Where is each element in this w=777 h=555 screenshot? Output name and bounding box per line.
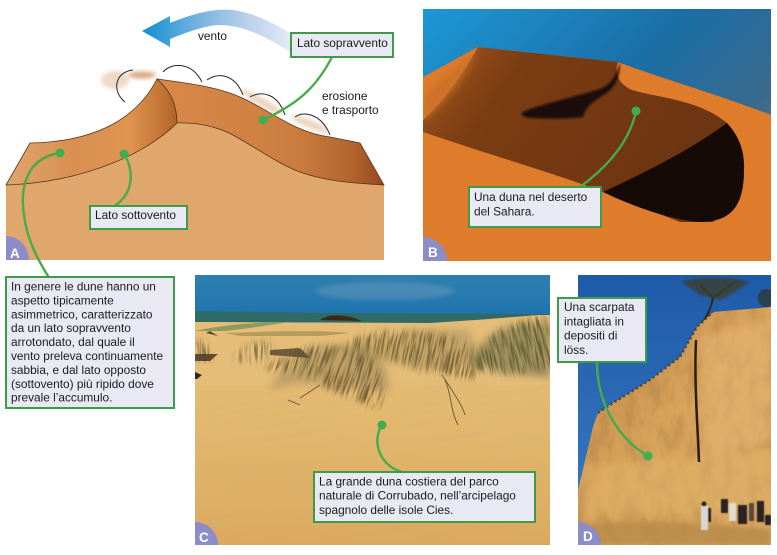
dark crest vegetation — [598, 312, 713, 413]
soft lit edge on slip face — [423, 47, 478, 122]
callout: coastal dune: spagnolo delle isole Cies. — [319, 503, 453, 517]
label: erosione e trasporto: e trasporto — [322, 103, 379, 117]
callout: loess: depositi di — [564, 329, 617, 343]
badge B: B — [428, 245, 438, 260]
tree — [682, 276, 771, 324]
leader — [597, 362, 652, 460]
badge A — [6, 236, 29, 261]
badge D — [578, 522, 601, 545]
lagoon — [195, 322, 290, 331]
people — [701, 499, 771, 530]
photo B: Sahara dune — [423, 9, 771, 261]
callout: dune description — [6, 277, 174, 408]
callout: dune description: vento preleva continuamente — [11, 349, 164, 363]
callout: dune description: (sottovento) più ripido dove — [11, 377, 154, 391]
callout: Sahara: del Sahara. — [474, 204, 535, 218]
callout: loess: Una scarpata — [564, 300, 635, 314]
callout: dune description: sabbia, e dal lato opposto — [11, 363, 146, 377]
wind arrow — [142, 10, 290, 52]
sky — [195, 275, 550, 315]
callout: coastal dune — [314, 472, 535, 522]
badge C: C — [199, 530, 209, 545]
photo D: loess scarp — [578, 275, 774, 545]
dune block front face — [6, 123, 384, 260]
leeward side band — [6, 79, 177, 185]
callout: Lato sottovento: Lato sottovento — [95, 208, 176, 222]
label: vento: vento — [198, 29, 227, 43]
windward side band — [157, 79, 384, 185]
photo C: coastal dune — [195, 275, 550, 545]
callout: Lato sottovento — [90, 206, 187, 229]
callout: loess: löss. — [564, 343, 588, 357]
callout: coastal dune: naturale di Corrubado, nell’arcipelago — [319, 489, 516, 503]
badge C — [195, 522, 218, 545]
callout: Lato sopravvento — [291, 33, 393, 57]
callout: dune description: aspetto tipicamente — [11, 293, 114, 307]
leader: Lato sopravvento — [258, 57, 332, 124]
shaded slip face — [423, 47, 743, 222]
badge D: D — [583, 529, 593, 544]
ground — [578, 521, 771, 545]
panel A: dune diagram — [6, 10, 384, 276]
crack — [695, 340, 699, 462]
callout: dune description: arrotondato, dal quale il — [11, 335, 135, 349]
sea and far shore — [195, 311, 550, 324]
saltation arcs — [117, 65, 330, 135]
leader: Lato sottovento — [116, 150, 131, 205]
dune crest — [198, 318, 501, 324]
callout: Sahara — [469, 187, 601, 227]
cliff — [578, 307, 771, 545]
callout: coastal dune: La grande duna costiera del parco — [319, 474, 499, 488]
callout: loess: intagliata in — [564, 314, 624, 328]
callout: dune description: da un lato sopravvento — [11, 321, 131, 335]
sand ripples — [166, 358, 581, 555]
cliff texture — [578, 300, 771, 545]
leader — [580, 106, 640, 187]
pale bands — [700, 320, 771, 460]
leader: explanatory text — [23, 148, 64, 276]
sand — [423, 47, 771, 261]
blown sand — [101, 71, 330, 135]
callout: loess — [558, 298, 646, 362]
callout: dune description: asimmetrico, caratterizzato — [11, 307, 153, 321]
badge B — [423, 237, 447, 261]
badge A: A — [10, 246, 20, 261]
callout: dune description: In genere le dune hanno un — [11, 280, 156, 294]
grass clumps — [190, 314, 565, 409]
leader — [377, 420, 402, 472]
upper shadow — [522, 62, 620, 119]
label: erosione e trasporto: erosione — [322, 89, 368, 103]
callout: Lato sopravvento: Lato sopravvento — [297, 36, 388, 50]
callout: Sahara: Una duna nel deserto — [474, 190, 588, 204]
callout: dune description: prevale l’accumulo. — [11, 391, 112, 405]
lower shadow — [603, 123, 744, 222]
